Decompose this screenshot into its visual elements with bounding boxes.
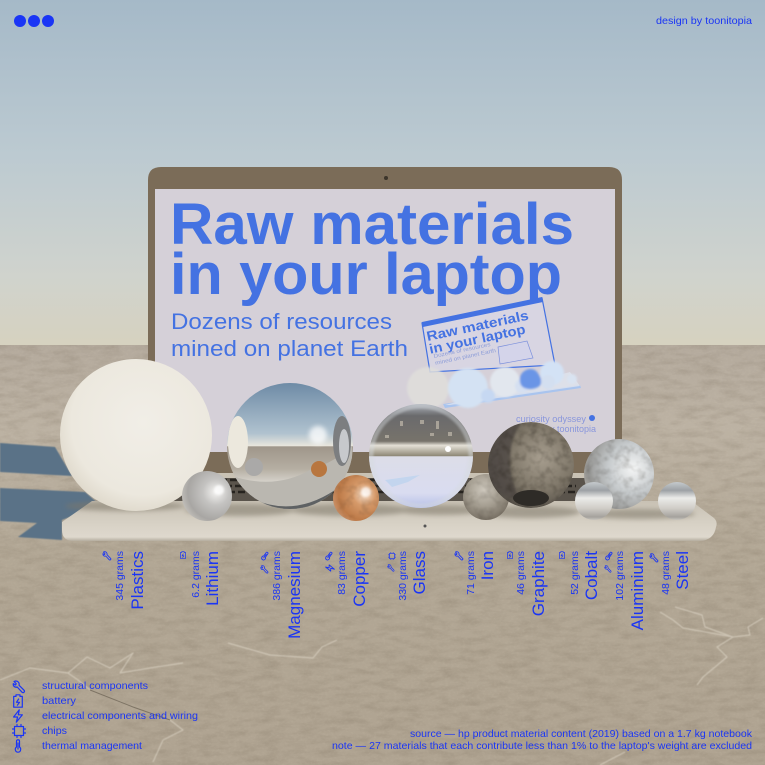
label: glass: 330 grams — [397, 551, 409, 601]
icon: chips — [12, 724, 26, 738]
subtitle: mined on planet Earth — [171, 336, 408, 361]
label: copper — [325, 551, 369, 607]
legend labels — [42, 680, 198, 752]
laptop lid — [148, 167, 622, 474]
sphere: cobalt — [575, 482, 613, 520]
label: lithium: Lithium — [203, 551, 222, 606]
label: magnesium: Magnesium — [285, 551, 304, 639]
laptop base — [62, 501, 717, 541]
label: plastics — [103, 551, 147, 610]
label: cobalt — [560, 551, 601, 600]
recursive mini infographic: in your laptop — [428, 322, 527, 357]
legend labels: structural components — [42, 680, 148, 692]
screen credits — [516, 414, 597, 435]
subtitle — [171, 309, 408, 361]
sphere: steel — [658, 482, 696, 520]
label: plastics: 345 grams — [114, 551, 126, 601]
icon: electrical components — [14, 710, 22, 722]
icon: battery — [14, 695, 22, 707]
cast shadows on the ground — [0, 443, 100, 540]
label: copper: Copper — [350, 551, 369, 607]
source and note: note — 27 materials that each contribute less than 1% to the laptop's weight are excluded — [332, 740, 752, 752]
label: graphite: Graphite — [529, 551, 548, 616]
background: salt flat ground — [0, 345, 765, 765]
label: graphite — [508, 551, 548, 616]
label: steel — [650, 551, 692, 595]
subtitle: Dozens of resources — [171, 309, 392, 334]
sphere: lithium — [182, 471, 232, 521]
recursive mini infographic: mined on planet Earth — [435, 348, 497, 367]
legend labels: thermal management — [42, 740, 142, 752]
label: lithium — [181, 551, 222, 606]
sphere: magnesium — [227, 383, 353, 515]
title — [170, 192, 574, 307]
label: copper: 83 grams — [336, 551, 348, 595]
source and note — [332, 728, 753, 752]
legend labels: chips — [42, 725, 67, 737]
label: cobalt: Cobalt — [582, 551, 601, 600]
icon: structural components — [13, 681, 24, 693]
label: aluminium: 102 grams — [614, 551, 626, 601]
legend labels: battery — [42, 695, 77, 707]
title: Raw materials — [170, 192, 574, 257]
sphere: iron — [463, 474, 509, 520]
recursive mini infographic: Raw materials — [425, 308, 530, 344]
recursive mini infographic — [407, 297, 581, 409]
screen credits: design by toonitopia — [516, 424, 597, 435]
sphere shadows on the base — [65, 501, 695, 519]
label: aluminium — [605, 551, 647, 630]
screen credits: curiosity odyssey — [516, 414, 586, 425]
legend labels: electrical components and wiring — [42, 710, 198, 722]
label: glass: Glass — [410, 551, 429, 594]
label: graphite: 46 grams — [515, 551, 527, 595]
title: in your laptop — [170, 242, 562, 307]
label: iron: Iron — [478, 551, 497, 580]
label: magnesium — [261, 551, 304, 639]
label: glass — [388, 551, 429, 601]
source and note: source — hp product material content (2019) based on a 1.7 kg notebook — [410, 728, 753, 740]
label: cobalt: 52 grams — [569, 551, 581, 595]
logo: three dots — [14, 15, 54, 27]
label: lithium: 6.2 grams — [190, 551, 202, 598]
sphere: graphite — [488, 422, 574, 508]
label: steel: Steel — [673, 551, 692, 590]
background: sky — [0, 0, 765, 346]
label: magnesium: 386 grams — [271, 551, 283, 601]
sphere: copper — [333, 475, 379, 521]
sphere: plastics — [60, 359, 212, 511]
laptop screen — [155, 176, 615, 452]
label: aluminium: Aluminium — [628, 551, 647, 630]
label: steel: 48 grams — [660, 551, 672, 595]
laptop keyboard deck — [130, 473, 640, 502]
label: plastics: Plastics — [128, 551, 147, 610]
recursive mini infographic: Dozens of resources — [433, 342, 491, 360]
sphere: aluminium — [584, 439, 654, 509]
label: iron — [455, 551, 497, 595]
icon: thermal management — [15, 740, 21, 752]
laptop — [62, 167, 717, 541]
credit: design by toonitopia: design by toonitopia — [656, 15, 752, 27]
label: iron: 71 grams — [465, 551, 477, 595]
sphere: glass — [369, 403, 473, 509]
legend — [12, 680, 198, 752]
